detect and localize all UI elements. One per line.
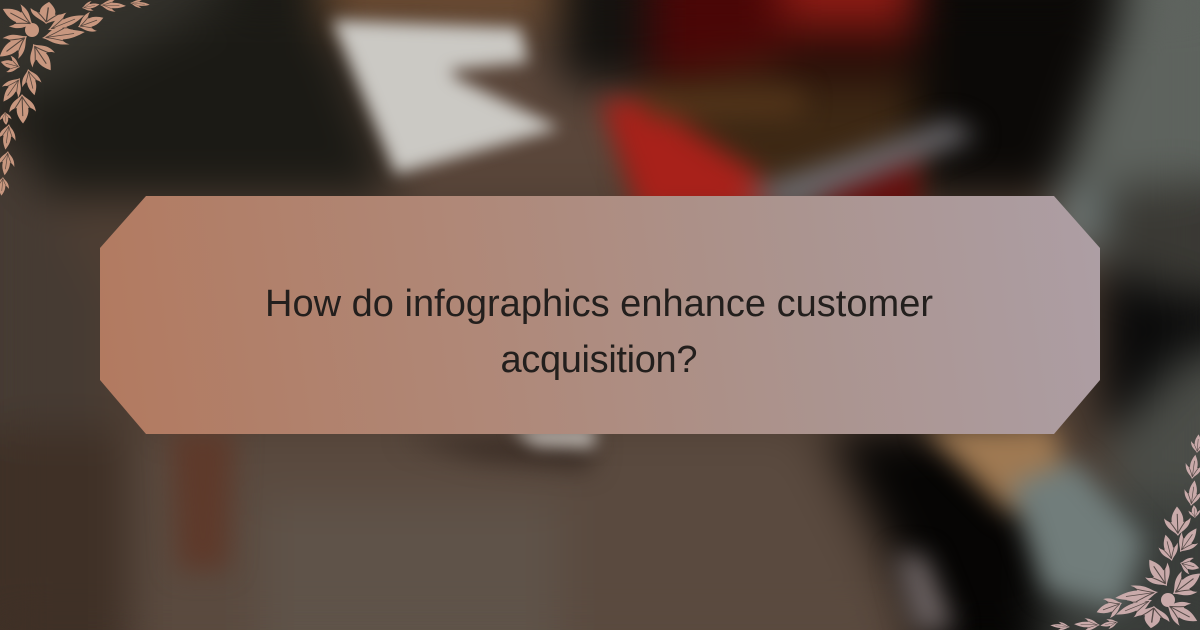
background: detailed blurred objects — [170, 92, 1145, 630]
heading: question text: acquisition? — [500, 339, 698, 381]
heading: question text — [265, 283, 933, 381]
ornament: bottom-right corner floral — [1050, 434, 1200, 630]
heading: question text: How do infographics enhance customer — [265, 283, 933, 325]
panel: question banner — [100, 196, 1100, 434]
ornament: top-left corner floral — [0, 0, 150, 196]
banner shape — [100, 196, 1100, 434]
